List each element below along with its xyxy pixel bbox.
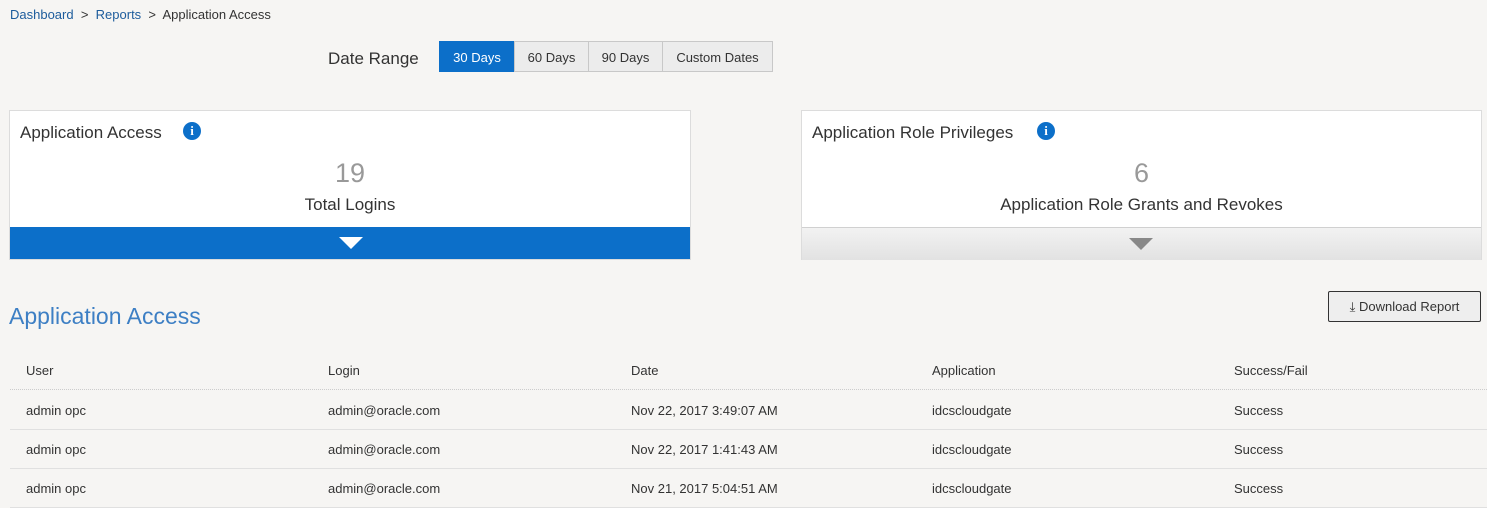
breadcrumb: Dashboard > Reports > Application Access bbox=[10, 7, 271, 22]
heading: Application Access bbox=[20, 123, 162, 142]
table header: Date bbox=[631, 363, 658, 378]
date range buttons bbox=[439, 41, 773, 72]
expand bar bbox=[802, 227, 1481, 260]
row 2: idcscloudgate bbox=[932, 442, 1012, 457]
icon: info: i bbox=[190, 123, 194, 138]
row 3 bbox=[10, 468, 1487, 508]
row 1: Success bbox=[1234, 403, 1283, 418]
date range buttons: 90 Days bbox=[602, 50, 649, 65]
table header bbox=[10, 350, 1487, 390]
row 2: Success bbox=[1234, 442, 1283, 457]
date range buttons: Custom Dates bbox=[676, 50, 759, 65]
row 2 bbox=[10, 429, 1487, 469]
row 2: admin opc bbox=[26, 442, 86, 457]
row 2: admin@oracle.com bbox=[328, 442, 440, 457]
row 1 bbox=[10, 390, 1487, 430]
table bbox=[10, 363, 1487, 508]
download button: ⤓ Download Report bbox=[1350, 299, 1459, 314]
panel: application role privileges bbox=[801, 110, 1482, 260]
row 1: admin@oracle.com bbox=[328, 403, 440, 418]
table header: Application bbox=[932, 363, 996, 378]
row 3: Nov 21, 2017 5:04:51 AM bbox=[631, 481, 778, 496]
table header: Success/Fail bbox=[1234, 363, 1308, 378]
download button bbox=[1328, 291, 1481, 322]
icon: info bbox=[1037, 122, 1055, 140]
number: 19 bbox=[335, 158, 365, 188]
row 3: Success bbox=[1234, 481, 1283, 496]
date range label: Date Range bbox=[328, 49, 419, 68]
row 2: Nov 22, 2017 1:41:43 AM bbox=[631, 442, 778, 457]
expand bar bbox=[10, 227, 690, 259]
number: 6 bbox=[1134, 158, 1149, 188]
row 3: idcscloudgate bbox=[932, 481, 1012, 496]
label: Total Logins bbox=[305, 195, 395, 214]
row 1: admin opc bbox=[26, 403, 86, 418]
date range buttons: 30 Days bbox=[453, 50, 501, 65]
date range buttons: 60 Days bbox=[528, 50, 575, 65]
row 1: Nov 22, 2017 3:49:07 AM bbox=[631, 403, 778, 418]
icon: info bbox=[183, 122, 201, 140]
panel: application access bbox=[9, 110, 691, 260]
label: Application Role Grants and Revokes bbox=[1000, 195, 1283, 214]
row 3: admin@oracle.com bbox=[328, 481, 440, 496]
section heading: Application Access bbox=[9, 303, 201, 329]
row 1: idcscloudgate bbox=[932, 403, 1012, 418]
icon: info: i bbox=[1044, 123, 1048, 138]
row 3: admin opc bbox=[26, 481, 86, 496]
table header: User bbox=[26, 363, 53, 378]
table header: Login bbox=[328, 363, 360, 378]
heading: Application Role Privileges bbox=[812, 123, 1013, 142]
